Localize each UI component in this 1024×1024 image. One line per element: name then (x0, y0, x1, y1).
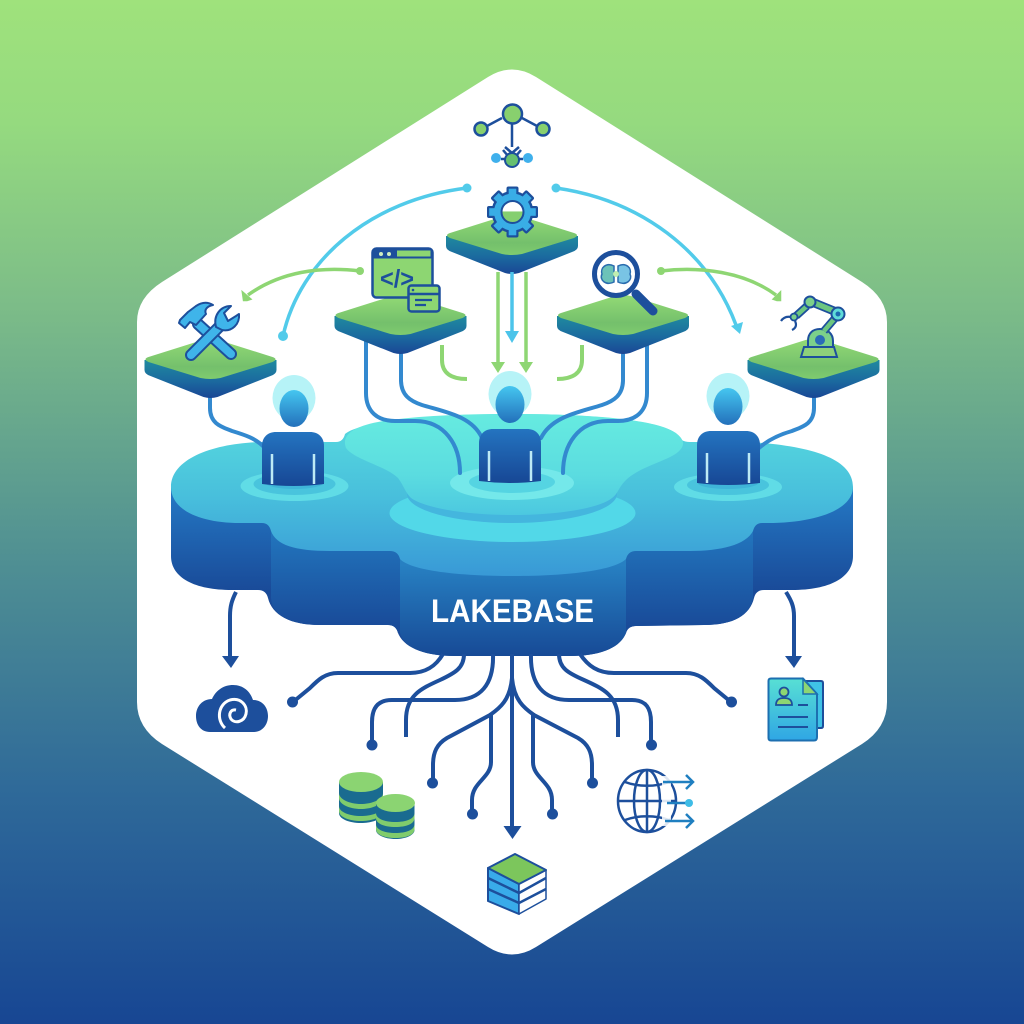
ripples: right person (674, 473, 782, 501)
icon: small window (408, 286, 440, 312)
platform: tools (144, 339, 276, 398)
icon: robot arm (781, 296, 844, 357)
title label: LAKEBASE: LAKEBASE (431, 593, 594, 629)
platform: settings (446, 215, 578, 274)
person: centre (479, 371, 541, 483)
platform: robot (748, 339, 880, 398)
icon: hammer and wrench (179, 303, 239, 355)
icon: stacked books (488, 854, 546, 914)
centre vertical arrows (491, 272, 533, 373)
cyan arc: right (552, 184, 743, 334)
icon: code window (372, 248, 432, 298)
green connectors from side platforms (442, 345, 582, 379)
icon: database cylinders (339, 772, 415, 839)
lake base: lakebase platform (171, 414, 853, 656)
root connector end points (287, 696, 737, 839)
platform: code (334, 295, 466, 354)
ripples: left person (240, 471, 348, 501)
lake surface (171, 414, 853, 576)
icon: globe with arrows (618, 770, 693, 832)
icon: network graph (474, 104, 550, 167)
platform: analysis (557, 295, 689, 354)
ripples: centre person (450, 466, 574, 500)
code symbol: </> (380, 265, 414, 293)
arrow: down to cloud (222, 592, 239, 668)
green arc: left (243, 267, 364, 300)
lake step ellipse (390, 484, 636, 542)
white hexagon panel (137, 70, 887, 954)
icon: magnifier with brain (594, 252, 653, 311)
blue connectors from platforms to people (210, 340, 814, 473)
arrow: down to document (785, 592, 802, 668)
lake step shadow (407, 465, 617, 523)
root connectors (293, 654, 731, 828)
person: right (697, 373, 760, 485)
icon: cloud with spiral (196, 685, 268, 732)
icon: gear (487, 186, 538, 238)
person: left (262, 375, 324, 486)
upper pool (345, 414, 683, 515)
green arc: right (657, 267, 780, 300)
cyan arc: left (278, 184, 472, 341)
icon: document (768, 678, 823, 740)
